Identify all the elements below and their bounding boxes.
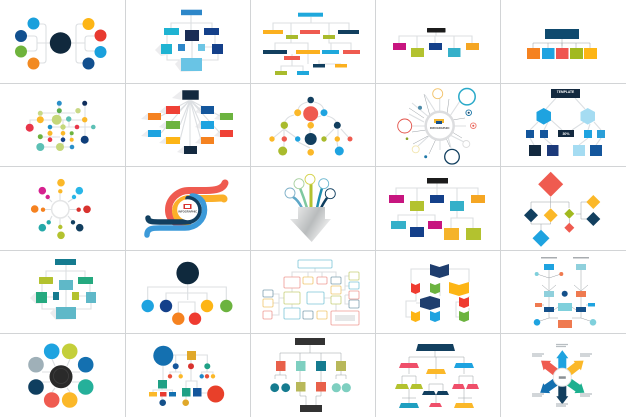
panel: multicolor flat org chart xyxy=(263,13,360,75)
panel: circle hierarchy xyxy=(142,262,232,325)
panel: trapezoid labels org chart xyxy=(395,344,479,408)
panel: multilevel color org chart xyxy=(389,178,485,240)
panel: big arrow with five circle stems xyxy=(285,174,335,242)
panel: mixed circles and squares tree xyxy=(149,346,224,406)
panel: network of small circles xyxy=(26,101,96,151)
panel: hexagon flowchart titled TEMPLATE: 30% xyxy=(562,132,570,136)
panel: two-headline decision tree xyxy=(534,257,596,328)
panel: outlined boxes flowchart xyxy=(263,260,359,325)
panel: ribbon book shapes flowchart xyxy=(406,264,469,322)
panel: hexagon flowchart titled TEMPLATE: TEMPLATE xyxy=(557,90,575,94)
panel: small org chart with offset boxes xyxy=(393,28,479,57)
panel: tree of colored circles xyxy=(269,97,352,156)
panel: six arrows around a central disc xyxy=(532,344,592,406)
panel: mind map with central circle xyxy=(15,18,106,70)
panel: circles around dark hub xyxy=(28,344,94,408)
panel: teal and green flowchart xyxy=(30,259,96,320)
panel: simple hierarchy with five boxes xyxy=(527,29,597,59)
panel: spiral ribbon infographic xyxy=(147,183,225,235)
panel: radial flowchart with long shadows xyxy=(141,90,233,154)
panel: squares and circles hierarchy xyxy=(270,338,351,412)
panel: radial infographic with central disc and rays xyxy=(398,88,476,164)
panel: blue flowchart with boxes and icons xyxy=(155,10,223,72)
panel: hexagon flowchart titled TEMPLATE xyxy=(526,89,605,156)
panel: diamond decision flowchart xyxy=(524,172,600,247)
panel: radial circles around a central disc xyxy=(31,179,91,239)
panel: radial infographic with central disc and rays: INFOGRAPHIC xyxy=(430,126,449,130)
panel: spiral ribbon infographic: INFOGRAPHIC xyxy=(178,210,197,214)
